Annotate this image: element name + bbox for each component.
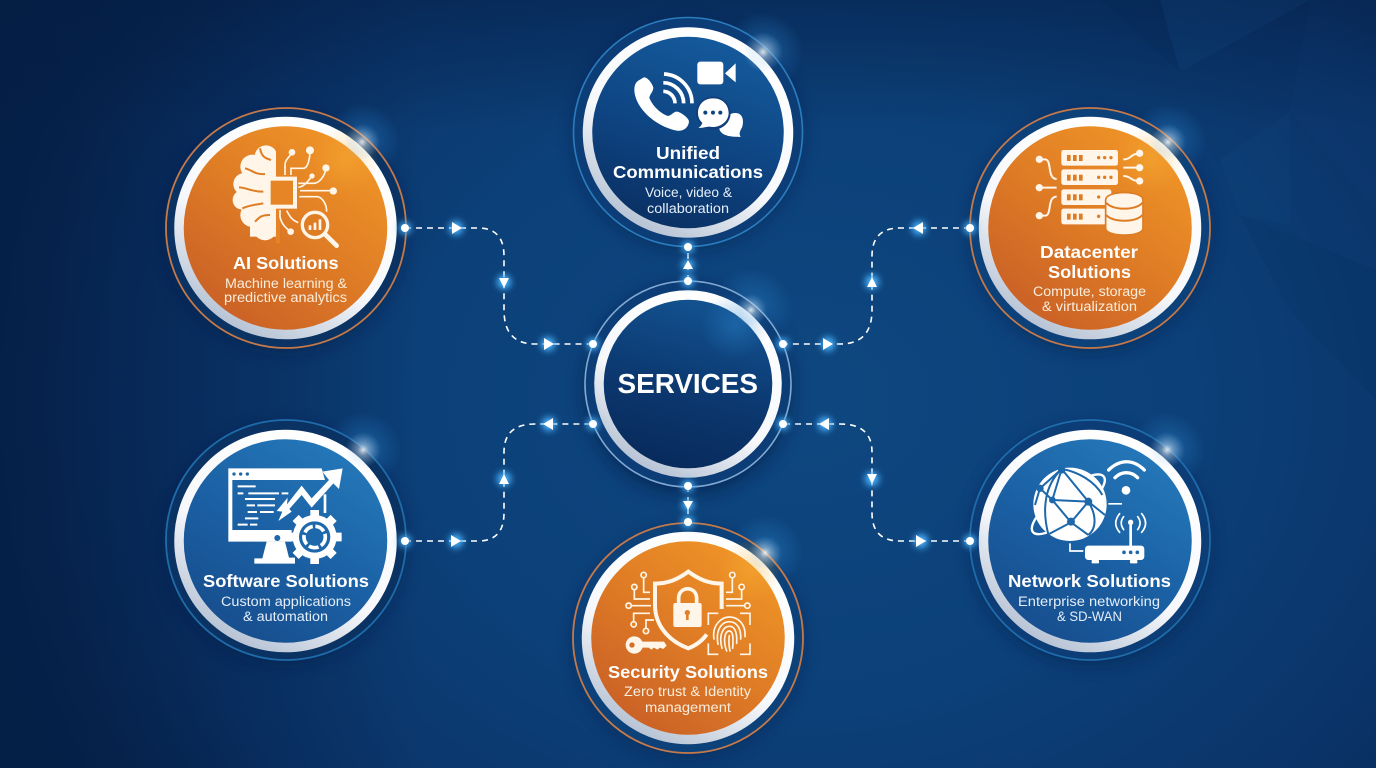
label: Security Solutions: management [645,700,731,715]
connector paths [405,228,970,541]
node: Datacenter Solutions [970,104,1210,350]
node: Network Solutions [970,412,1210,663]
label: AI Solutions: Machine learning & [225,276,347,291]
label: Network Solutions: Network Solutions [1008,571,1171,591]
connector nodes [401,224,974,545]
node: Security Solutions [573,515,803,754]
label: Network Solutions [1008,571,1171,624]
label: Unified Communications: Communications [613,162,763,182]
label: Software Solutions: Custom applications [221,594,351,609]
central node: SERVICES [584,268,793,494]
icon: phone, video and chat [634,62,743,137]
label: Unified Communications: collaboration [647,201,729,216]
label: AI Solutions: predictive analytics [224,290,347,305]
label: Security Solutions: Zero trust & Identity [624,684,751,699]
icon: shield, lock, key and fingerprint [626,572,750,654]
label: Datacenter Solutions: Compute, storage [1033,284,1146,299]
node: AI Solutions [166,104,406,350]
label: Unified Communications: Unified [656,143,720,163]
label: Network Solutions: & SD-WAN [1057,609,1122,624]
heading: SERVICES: SERVICES [618,368,758,399]
node: Software Solutions [166,412,406,662]
label: Network Solutions: Enterprise networking [1018,594,1160,609]
label: Datacenter Solutions: & virtualization [1042,299,1137,314]
icon: brain with chip and magnifier [233,143,337,246]
icon: servers and database [1036,150,1143,235]
connector arrowheads [451,222,926,547]
icon: monitor, growth arrow and gear [228,468,343,564]
label: Software Solutions: Software Solutions [203,571,369,591]
icon: globe, wifi and router [1024,462,1146,563]
label: AI Solutions [224,253,347,305]
label: AI Solutions: AI Solutions [233,253,339,273]
label: Datacenter Solutions: Datacenter [1040,242,1138,262]
label: Unified Communications [613,143,763,216]
label: Security Solutions: Security Solutions [608,662,768,682]
connector arrow glows [399,221,976,548]
label: Security Solutions [608,662,768,715]
label: Datacenter Solutions [1033,242,1146,314]
label: Datacenter Solutions: Solutions [1048,262,1131,282]
label: Unified Communications: Voice, video & [645,185,732,200]
label: Software Solutions [203,571,369,624]
label: Software Solutions: & automation [243,609,328,624]
node: Unified Communications [574,12,803,248]
